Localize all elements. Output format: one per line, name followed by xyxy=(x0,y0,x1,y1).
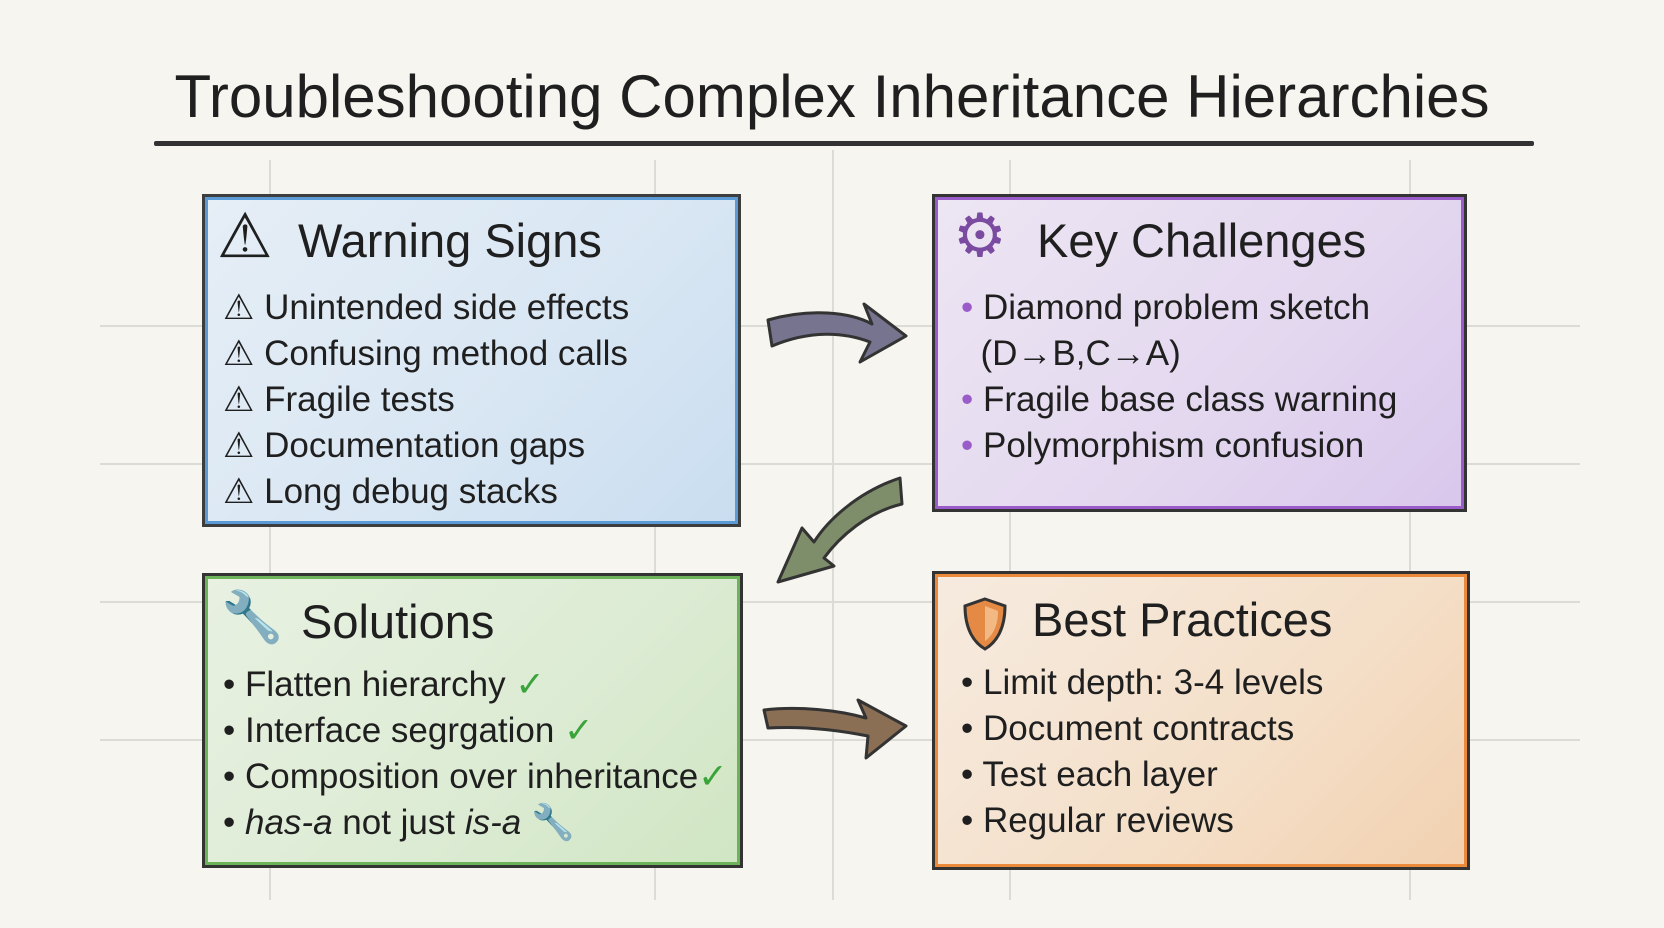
list: solutions xyxy=(223,665,728,842)
heading: warning signs: Warning Signs xyxy=(298,214,602,267)
icon: gear: ⚙ xyxy=(953,202,1007,269)
list: key challenges: • Fragile base class warning xyxy=(961,380,1397,419)
list: solutions: • Composition over inheritance✓ xyxy=(223,757,728,796)
list: key challenges xyxy=(961,288,1397,465)
arrow: warning to challenges xyxy=(766,302,908,364)
panel: warning signs xyxy=(202,194,741,527)
list: best practices: • Document contracts xyxy=(961,709,1294,748)
panel: key challenges xyxy=(932,194,1467,512)
title underline xyxy=(154,141,1534,146)
icon: wrench: 🔧 xyxy=(221,589,283,645)
list: solutions: • Flatten hierarchy ✓ xyxy=(223,665,545,704)
icon: warning: ⚠ xyxy=(217,202,273,271)
list: best practices: • Limit depth: 3-4 levels xyxy=(961,663,1323,702)
list: warning signs: ⚠ Confusing method calls xyxy=(223,334,628,373)
list: key challenges: (D→B,C→A) xyxy=(980,334,1181,373)
arrow: challenges to solutions xyxy=(776,476,904,584)
heading: key challenges: Key Challenges xyxy=(1037,214,1366,267)
list: warning signs: ⚠ Long debug stacks xyxy=(223,472,558,511)
arrow: solutions to best practices xyxy=(762,698,908,760)
list: warning signs: ⚠ Unintended side effects xyxy=(223,288,629,327)
list: best practices xyxy=(961,663,1323,840)
title: Troubleshooting Complex Inheritance Hierarchies xyxy=(174,63,1490,130)
list: solutions: • Interface segrgation ✓ xyxy=(223,711,593,750)
list: warning signs: ⚠ Documentation gaps xyxy=(223,426,585,465)
list: best practices: • Regular reviews xyxy=(961,801,1234,840)
heading: solutions: Solutions xyxy=(301,595,494,648)
panel: solutions xyxy=(202,573,743,868)
heading: best practices: Best Practices xyxy=(1032,593,1332,646)
list: key challenges: • Diamond problem sketch xyxy=(961,288,1370,327)
icon: shield xyxy=(964,597,1006,651)
list: key challenges: • Polymorphism confusion xyxy=(961,426,1364,465)
list: warning signs: ⚠ Fragile tests xyxy=(223,380,455,419)
panel: best practices xyxy=(932,571,1470,870)
list: solutions: • has-a not just is-a 🔧 xyxy=(223,803,575,842)
list: best practices: • Test each layer xyxy=(961,755,1218,794)
list: warning signs xyxy=(223,288,629,511)
